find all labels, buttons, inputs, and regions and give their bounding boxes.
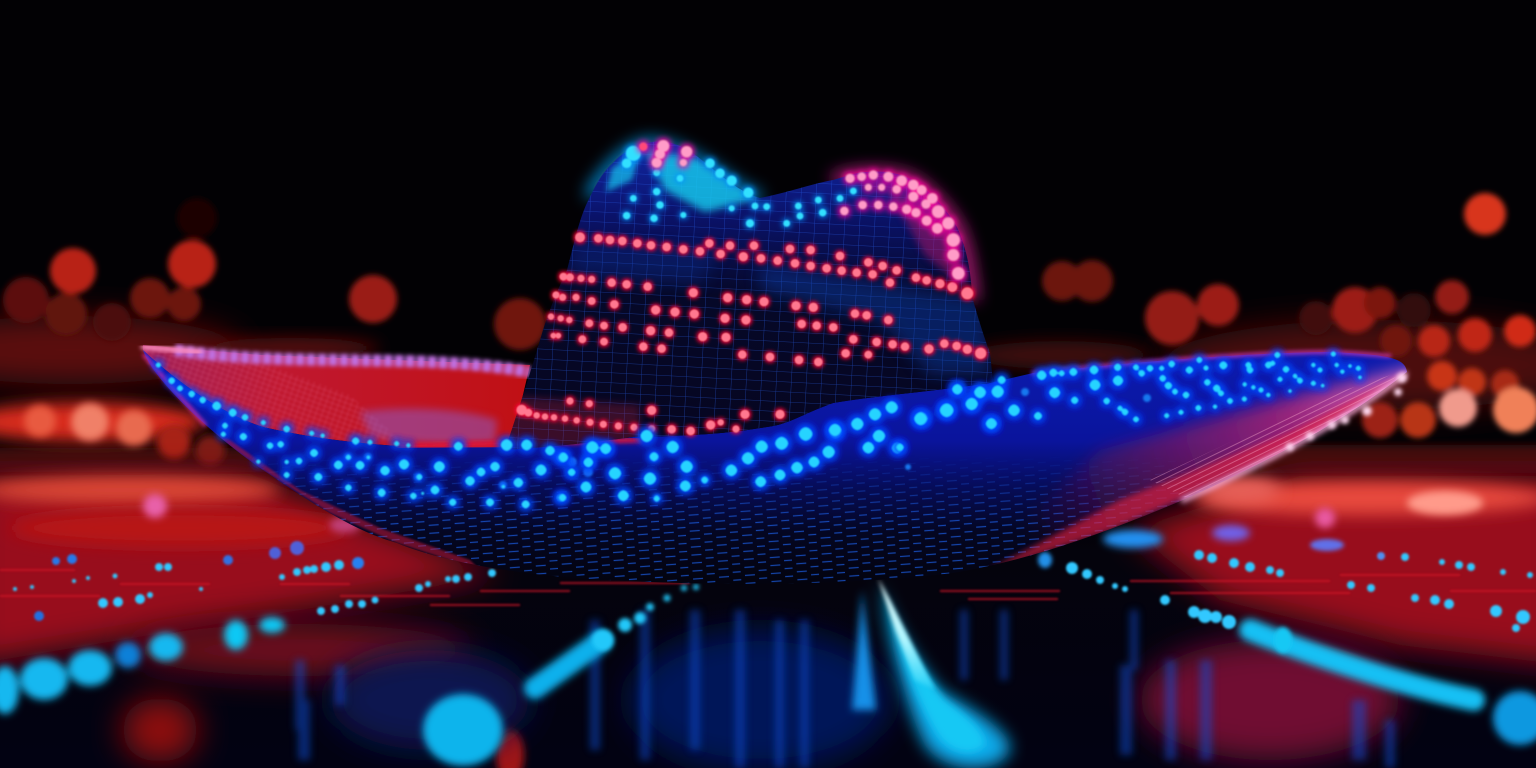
main light beam under hat — [852, 578, 1010, 768]
hat crown — [500, 130, 1000, 460]
hat brim: outer surface — [140, 350, 1420, 590]
floor red: right — [1038, 476, 1536, 665]
floor light strand: centre left — [423, 584, 699, 766]
crown LEDs: red rows — [517, 233, 986, 435]
floor base — [0, 460, 1536, 768]
glowing band: left — [0, 402, 225, 465]
brim LEDs: cyan rows, right — [895, 350, 1363, 452]
crown LEDs: cyan — [622, 146, 857, 227]
brim LEDs: cyan rows, right of crown — [828, 383, 1001, 437]
hat brim: glowing edges — [143, 347, 1405, 500]
floor reflections: lower area — [122, 610, 1400, 768]
background red haze — [0, 316, 1536, 473]
brim LEDs: cyan rows, centre — [520, 424, 904, 503]
floor light strands: right — [1066, 550, 1536, 745]
floor light strands: left — [0, 541, 496, 714]
crown glow halo — [590, 144, 973, 300]
brim LEDs: dim blue — [344, 388, 1151, 502]
crown LEDs: pink rim — [639, 140, 964, 279]
brim right tip: white-pink LED edge — [1286, 373, 1407, 451]
floor red streak lines — [0, 569, 1536, 606]
bokeh lights: left — [3, 198, 546, 350]
floor red: left — [0, 474, 500, 665]
brim LEDs: cyan rows, left — [155, 361, 611, 509]
bokeh lights: right — [1042, 193, 1536, 438]
hat brim: back inner surface — [143, 345, 530, 450]
